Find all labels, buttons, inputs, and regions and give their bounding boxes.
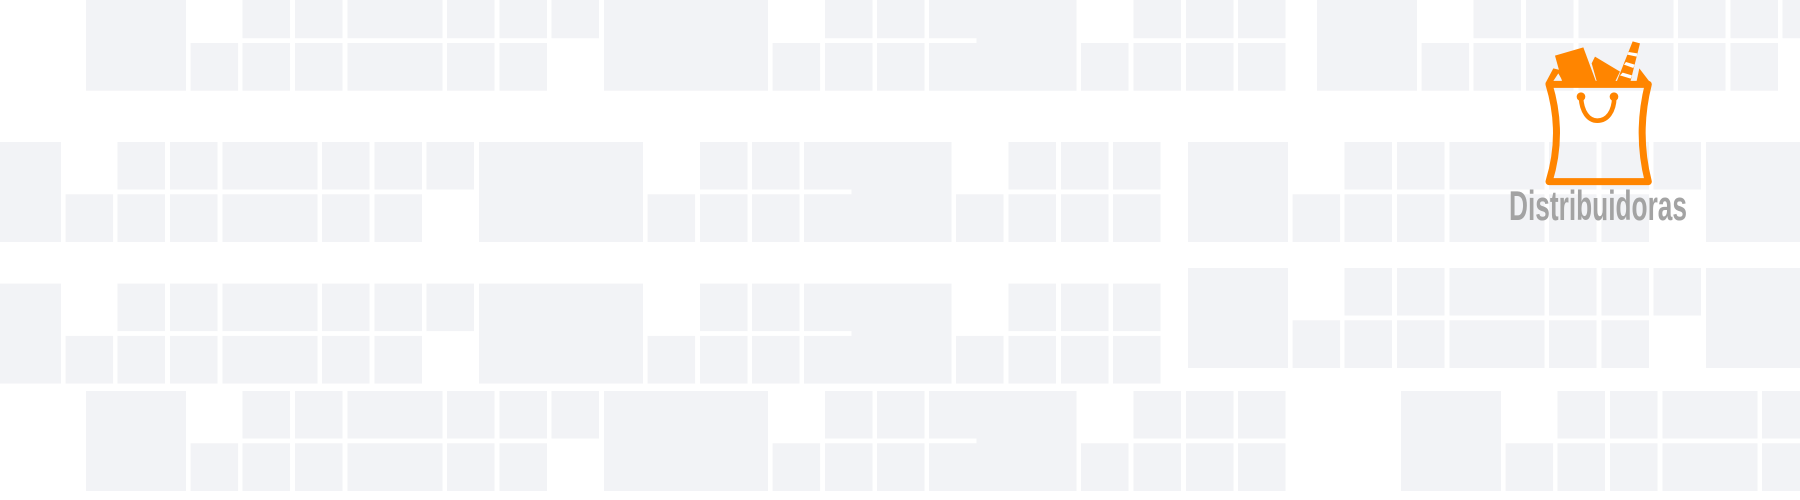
icon: orange shopping bag with products — [1545, 41, 1651, 182]
panel: background tile row 3 — [0, 268, 1800, 384]
panel: background tile row 4 — [86, 391, 1800, 491]
icon: right bag flap — [1636, 68, 1651, 84]
panel: background tile row 2 — [0, 142, 1800, 242]
icon: bag body outline — [1549, 84, 1648, 182]
icon: bag smile handle — [1578, 94, 1617, 121]
panel: background tile row 1 — [86, 0, 1800, 91]
label: Distribuidoras: Distribuidoras — [1509, 182, 1687, 229]
icon: second package in bag — [1592, 57, 1620, 83]
icon: striped straw — [1616, 41, 1640, 83]
icon: box in bag — [1555, 47, 1597, 83]
icon: left bag flap — [1545, 68, 1565, 85]
